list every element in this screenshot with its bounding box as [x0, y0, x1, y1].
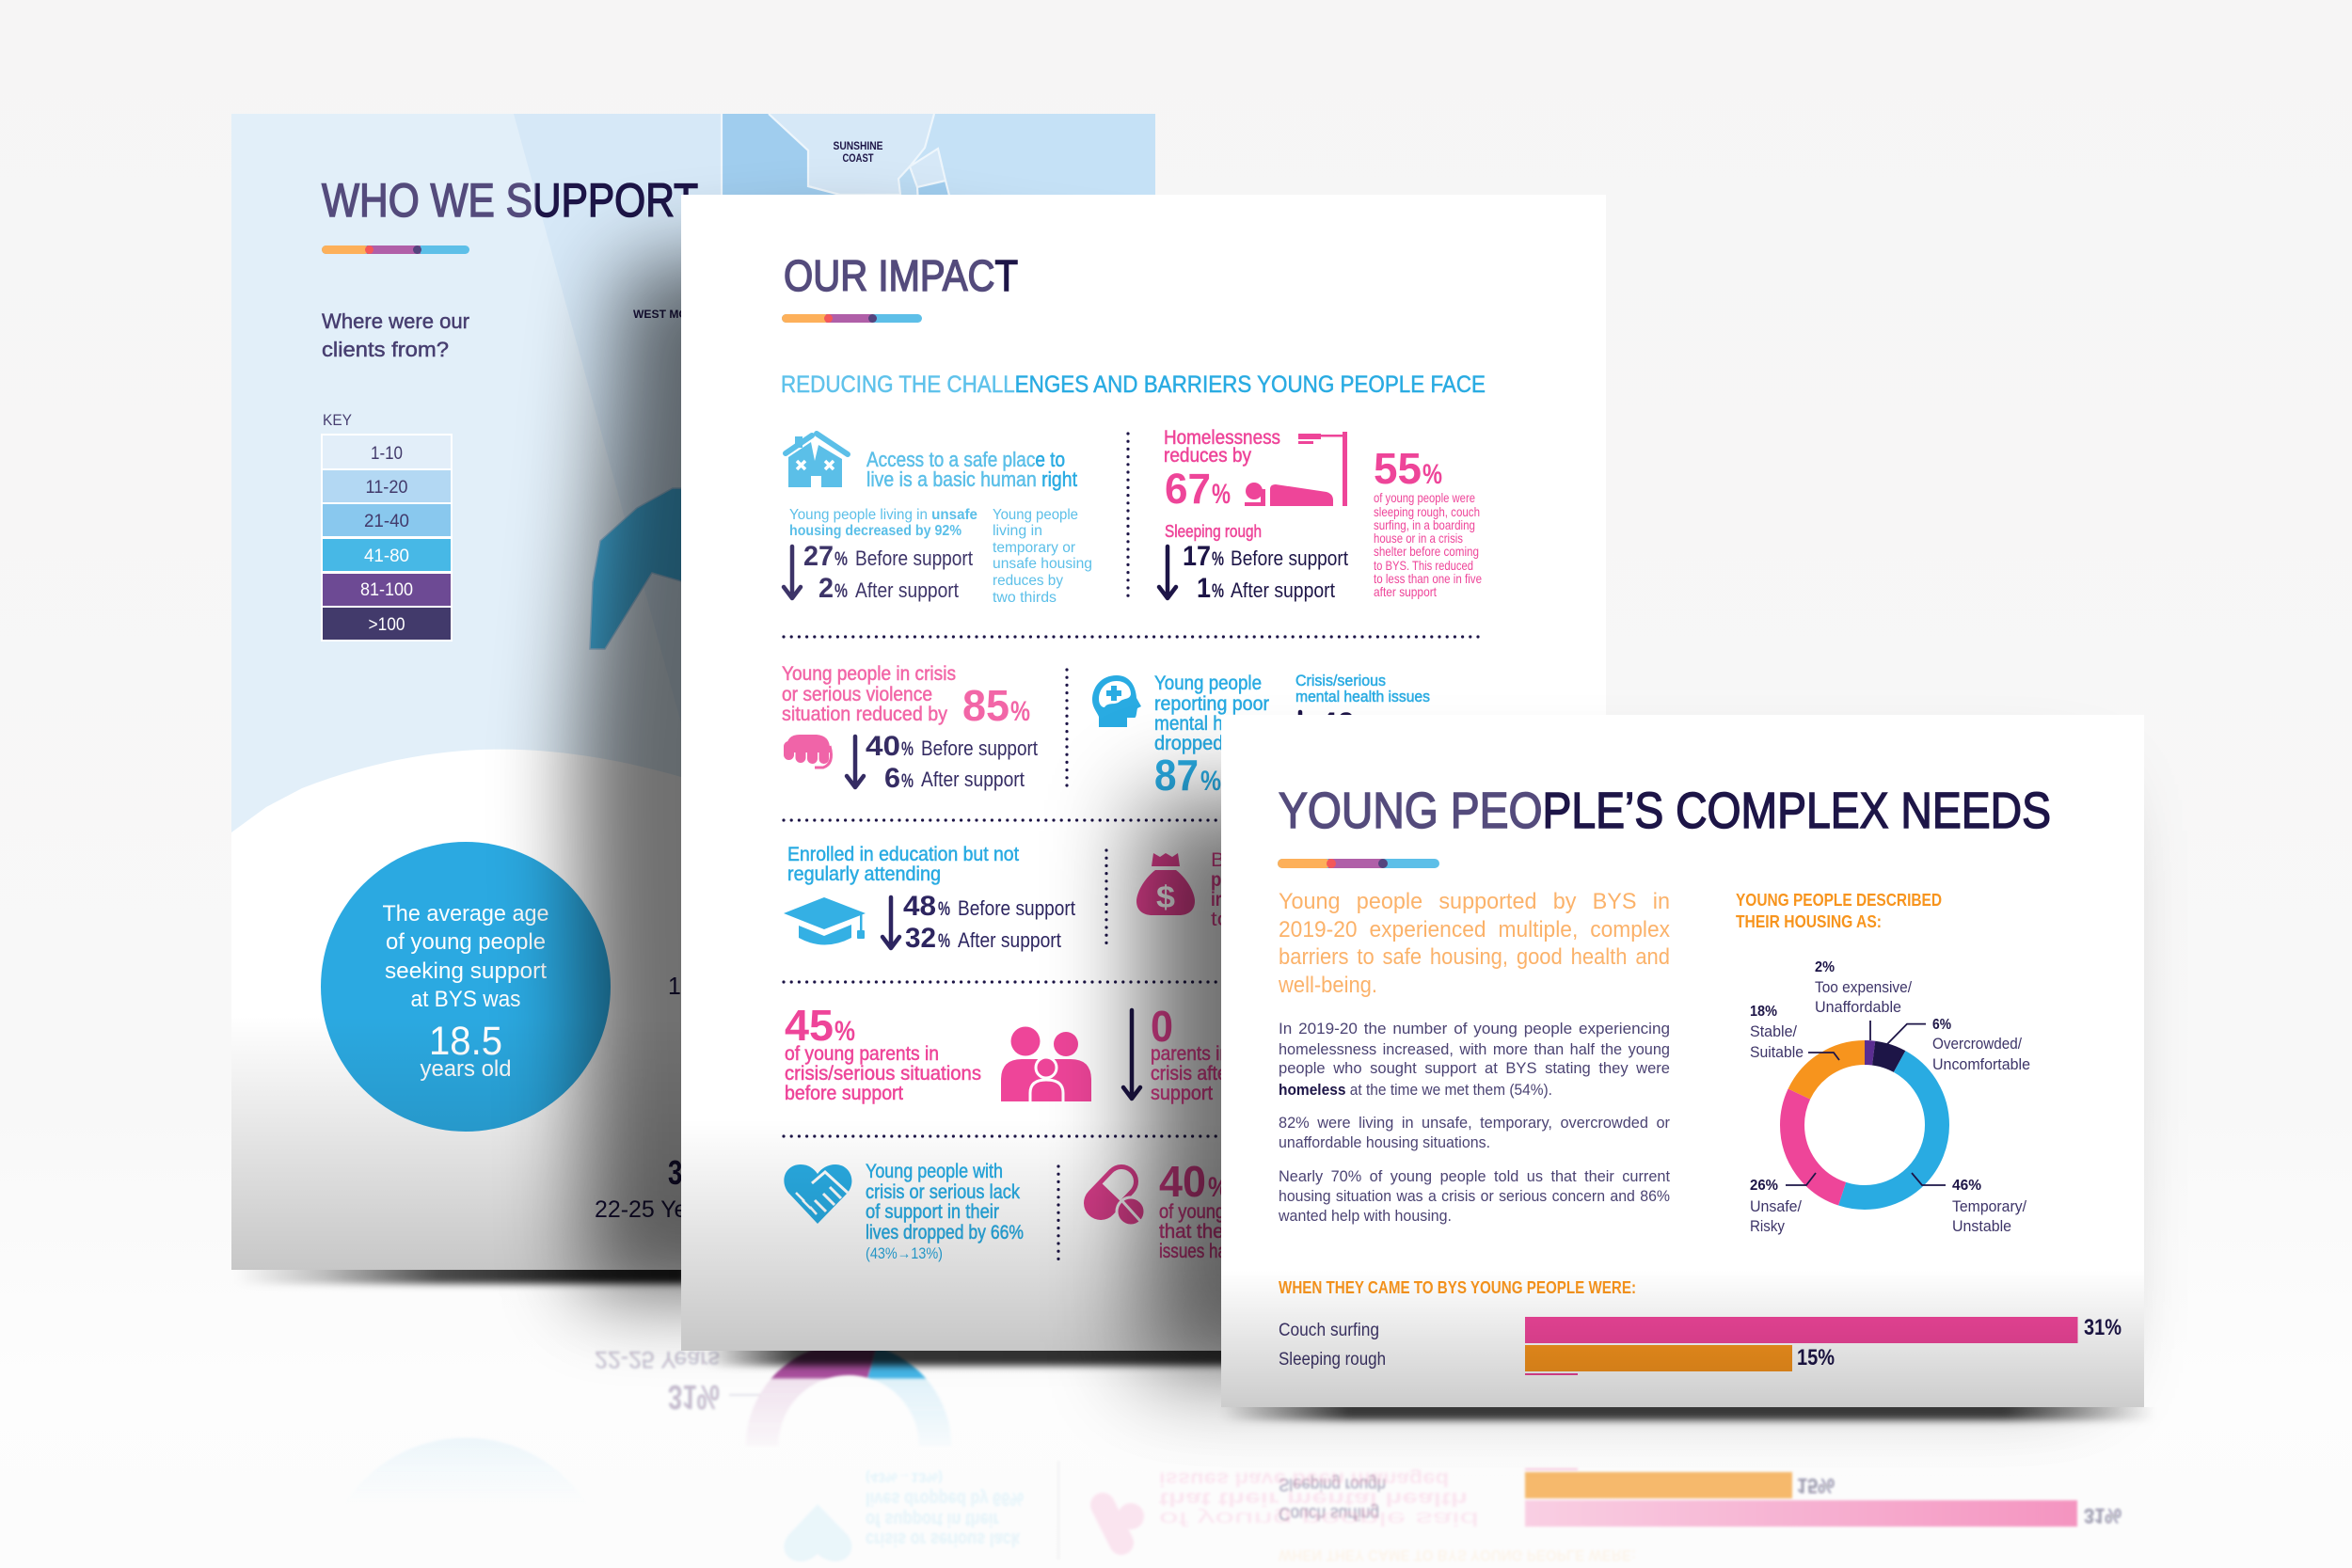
reflection: bar labels: Sleeping rough: [1279, 1474, 1386, 1494]
arrow: [1159, 546, 1176, 598]
reflection: dotted divider: [1057, 1461, 1059, 1560]
block text: [866, 1161, 1024, 1262]
block heading: [787, 844, 1019, 885]
donut label: 6%: 6%: [1932, 1017, 1951, 1033]
body text: people who sought support at BYS stating they were: [1279, 1060, 1670, 1077]
block: safe place: [784, 434, 1092, 606]
before and after stats: %: [1212, 548, 1224, 570]
before and after stats: %: [938, 898, 950, 920]
map: SUNSHINE: [834, 139, 882, 152]
bar chart: Sleeping rough: [1279, 1350, 1386, 1370]
before and after stats: %: [1212, 580, 1224, 602]
donut label: 2%: Unaffordable: [1815, 998, 1901, 1016]
icon: heart handshake: [784, 1164, 851, 1224]
average age circle: The average age: [382, 901, 549, 927]
block heading: [1164, 427, 1280, 467]
icon: graduation cap: [784, 897, 866, 944]
block heading: dropped by: [1154, 733, 1248, 754]
block: crisis or violence: [782, 663, 1038, 794]
icon: money bag: $: [1156, 879, 1175, 914]
stat: 40%: 40: [1159, 1157, 1206, 1206]
before and after stats: %: [834, 548, 848, 570]
block heading: or serious violence: [782, 684, 932, 705]
note: house or in a crisis: [1374, 531, 1463, 546]
stat: 67%: 67: [1165, 465, 1211, 513]
donut label: 46%: Temporary/: [1952, 1197, 2026, 1215]
partly hidden text: [1211, 849, 1295, 930]
map key: 11-20: [365, 478, 408, 498]
bar chart: Couch surfing: [1279, 1321, 1379, 1340]
reflection: pill text: issues have been managed: [1159, 1468, 1449, 1489]
note: [785, 1043, 981, 1104]
before and after stats: %: [834, 580, 848, 602]
map key: [321, 411, 453, 641]
icon: money bag: [1136, 853, 1195, 915]
lead text: [1278, 889, 1670, 998]
colour bar: [1278, 859, 1439, 868]
reflection: pill text: [1159, 1468, 1479, 1528]
stat: 55%: %: [1422, 459, 1442, 490]
reflection: pill text: that their mental health: [1159, 1488, 1468, 1509]
stat: 0 parents: crisis after: [1151, 1063, 1233, 1085]
note: after support: [1374, 584, 1437, 599]
white curve: [231, 749, 681, 1270]
partly hidden text: irregular: [1211, 889, 1277, 911]
icon: pills: [1101, 1169, 1145, 1226]
chart heading: [1736, 891, 1942, 931]
body text: 82% were living in unsafe, temporary, overcrowded or: [1279, 1115, 1670, 1132]
left note: [789, 507, 977, 539]
arrow: [847, 736, 864, 787]
before and after stats: After support: [1231, 578, 1335, 602]
body text: In 2019-20 the number of young people experiencing: [1279, 1021, 1670, 1037]
block heading: [782, 663, 956, 725]
stat: 67%: %: [1212, 479, 1231, 510]
partly hidden text: poverty or: [1211, 869, 1295, 891]
sheen: [231, 114, 610, 832]
right note: Young people: [993, 507, 1078, 523]
title: WHO WE SUPPORT: [322, 174, 698, 227]
before and after stats: 48: [903, 891, 936, 922]
average age circle: [321, 842, 611, 1132]
leader lines: [1786, 1021, 1946, 1185]
lead text: well-being.: [1278, 973, 1377, 998]
lead text: Young people supported by BYS in: [1279, 889, 1670, 914]
average age circle: years old: [420, 1056, 512, 1082]
block heading: live is a basic human right: [866, 467, 1077, 491]
soft shadow of page two: [576, 246, 1599, 1296]
partly hidden text: of young people: [1159, 1201, 1281, 1223]
reflection: handshake text: of support in their: [866, 1509, 999, 1529]
map: [721, 114, 1155, 195]
donut label: 26%: Unsafe/: [1750, 1197, 1802, 1215]
partly hidden text: that their: [1159, 1221, 1234, 1243]
donut label: 6%: [1932, 1017, 2030, 1073]
note: to less than one in five: [1374, 571, 1482, 586]
before and after stats: [803, 541, 973, 604]
shadow under page three: [1227, 1407, 2148, 1426]
arrow: [882, 897, 899, 948]
reflection: bar labels: [1279, 1474, 1386, 1523]
before and after stats: 1: [1197, 573, 1211, 604]
shadow under page one: [247, 1270, 681, 1291]
colour bar: [322, 245, 469, 254]
lead text: 2019-20 experienced multiple, complex: [1279, 917, 1670, 942]
block heading: Young people: [1154, 673, 1262, 694]
section heading: REDUCING THE CHALLENGES AND BARRIERS YOUNG PEOPLE FACE: [781, 372, 1486, 398]
block heading: mental health: [1154, 713, 1262, 735]
map key: 1-10: [371, 444, 403, 464]
partly hidden text: [1159, 1201, 1281, 1262]
note: Crisis/serious: [1295, 672, 1386, 689]
block heading: Enrolled in education but not: [787, 844, 1019, 865]
stat: 0 parents: [1151, 1002, 1233, 1104]
average age circle: at BYS was: [410, 987, 521, 1012]
body text: housing situation was a crisis or serious concern and 86%: [1279, 1188, 1670, 1205]
reflection: heart icon: [784, 1504, 851, 1561]
stat: 0 parents: 0: [1151, 1002, 1173, 1051]
stat: 55%: 55: [1374, 444, 1422, 493]
block: medication: [1101, 1157, 1281, 1262]
donut label: 18%: [1750, 1004, 1804, 1061]
age group labels: 31%: [668, 1153, 720, 1192]
before and after stats: [866, 731, 1038, 794]
question text: Where were our: [322, 309, 469, 333]
donut label: 26%: Risky: [1750, 1217, 1785, 1235]
block heading: Access to a safe place to: [866, 448, 1065, 471]
reflection: pill icon: [1103, 1503, 1144, 1543]
stat: 0 parents: support: [1151, 1083, 1213, 1104]
reflection: blue circle: [343, 1438, 588, 1505]
donut label: 46%: Unstable: [1952, 1217, 2011, 1235]
reflection: bar heading: WHEN THEY CAME TO BYS YOUNG PEOPLE WERE:: [1279, 1546, 1636, 1564]
before and after stats: Before support: [1231, 546, 1348, 570]
before and after stats: After support: [855, 578, 959, 602]
sub heading: Sleeping rough: [1165, 522, 1262, 541]
lead text: barriers to safe housing, good health and: [1279, 944, 1670, 970]
body text: wanted help with housing.: [1278, 1208, 1452, 1225]
before and after stats: 2: [818, 573, 834, 604]
donut label: 26%: [1750, 1178, 1802, 1235]
before and after stats: [903, 891, 1075, 954]
stat: partly hidden: [1300, 707, 1355, 743]
map region: west moreton: [589, 487, 681, 650]
before and after stats: Before support: [958, 896, 1075, 920]
reflection: handshake text: (43%→13%): [866, 1469, 943, 1485]
colour bar: [782, 314, 922, 323]
before and after stats: %: [901, 738, 914, 760]
stat: 0 parents: parents in: [1151, 1043, 1230, 1065]
panel: young people's complex needs: [1221, 715, 2144, 1407]
stat: 85%: 85: [962, 681, 1009, 730]
stat: 45%: 45: [785, 1001, 834, 1050]
note: to BYS. This reduced: [1374, 558, 1473, 573]
block text: (43%→13%): [866, 1244, 943, 1262]
reflection: bar values: 31%: [2084, 1504, 2122, 1528]
map label: WEST MORETON: [633, 309, 727, 321]
bar chart: 31%: [2084, 1315, 2122, 1340]
block: education: [784, 844, 1075, 954]
age group labels: 22-25 Years: [595, 1196, 720, 1223]
partly hidden text: issues have: [1159, 1241, 1244, 1262]
donut label: 18%: Suitable: [1750, 1043, 1804, 1061]
chart heading: YOUNG PEOPLE DESCRIBED: [1736, 891, 1942, 910]
average age circle: seeking support: [385, 958, 547, 984]
reflection: bars: [1525, 1468, 2077, 1527]
reflection: bar values: 15%: [1797, 1474, 1835, 1497]
block heading: [1154, 673, 1269, 754]
page background: [1221, 715, 2144, 1407]
note: before support: [785, 1083, 903, 1104]
block heading: Young people in crisis: [782, 663, 956, 685]
icon: street lamp: [1298, 432, 1347, 506]
note: sleeping rough, couch: [1374, 504, 1480, 519]
right note: [993, 507, 1092, 606]
map: COAST: [843, 151, 874, 165]
donut label: 6%: Uncomfortable: [1932, 1055, 2030, 1073]
stat: 45%: [785, 1001, 855, 1050]
right note: reduces by: [993, 573, 1063, 589]
block text: of support in their: [866, 1201, 999, 1223]
note: crisis/serious situations: [785, 1063, 981, 1085]
block: mental health: [1092, 672, 1430, 800]
before and after stats: %: [901, 770, 914, 792]
block: poverty: [1136, 849, 1295, 930]
reflection: age labels: 22-25 Years: [595, 1346, 720, 1372]
body text: Nearly 70% of young people told us that their current: [1279, 1168, 1670, 1185]
donut label: 2%: [1815, 959, 1912, 1016]
block heading: situation reduced by: [782, 704, 947, 725]
before and after stats: [1183, 541, 1348, 604]
page background: [231, 114, 721, 832]
before and after stats: Before support: [855, 546, 973, 570]
right note: two thirds: [993, 590, 1057, 606]
question text: clients from?: [322, 338, 449, 361]
icon: head with cross: [1092, 675, 1141, 727]
page fade: [231, 1054, 681, 1270]
block heading: regularly attending: [787, 863, 941, 885]
page background: [681, 195, 1606, 1351]
icon: fist: [784, 735, 831, 768]
reflection: bar values: [1797, 1474, 2122, 1528]
note: shelter before coming: [1374, 544, 1479, 559]
icon: family: [1001, 1027, 1091, 1101]
bar chart heading: WHEN THEY CAME TO BYS YOUNG PEOPLE WERE:: [1279, 1278, 1636, 1297]
donut label: 46%: 46%: [1952, 1178, 1981, 1194]
reflection: handshake text: lives dropped by 66%: [866, 1488, 1024, 1509]
stat: 87%: %: [1200, 766, 1221, 797]
average age circle: of young people: [386, 929, 546, 955]
chart heading: THEIR HOUSING AS:: [1736, 912, 1882, 931]
right note: temporary or: [993, 540, 1076, 556]
block heading: Homelessness: [1164, 427, 1280, 449]
note: surfing, in a boarding: [1374, 517, 1475, 532]
donut label: 2%: 2%: [1815, 959, 1835, 975]
stat: 45%: %: [834, 1016, 855, 1047]
block heading: reporting poor: [1154, 693, 1269, 715]
average age circle: 18.5: [429, 1019, 502, 1064]
age group labels: 16%: [668, 972, 715, 1000]
donut chart: [1792, 1053, 1937, 1197]
stat: 40%: %: [1208, 1172, 1229, 1203]
reflection: bar labels: Couch surfing: [1279, 1503, 1379, 1523]
reflection: page one donut: [762, 1359, 935, 1446]
bar chart: 15%: [1797, 1345, 1835, 1370]
page fade: [1221, 1270, 2144, 1407]
question text: [322, 312, 469, 357]
reflection: pill text: of young people said: [1159, 1508, 1479, 1528]
block: homelessness: [1159, 427, 1482, 604]
reflections on the floor: [343, 1346, 2122, 1564]
age group labels: [596, 977, 681, 1217]
map key: 81-100: [360, 580, 413, 600]
before and after stats: Before support: [921, 736, 1038, 760]
partly hidden text: to: [1211, 909, 1230, 930]
arrow: [1123, 1010, 1140, 1099]
title: OUR IMPACT: [784, 251, 1018, 300]
body text: [1278, 1021, 1670, 1225]
before and after stats: After support: [921, 768, 1025, 791]
before and after stats: 32: [905, 923, 936, 954]
icon: person sleeping: [1245, 483, 1333, 506]
panel: who we support: [231, 114, 1155, 1270]
partly hidden text: Being in: [1211, 849, 1286, 871]
map key: 21-40: [364, 512, 409, 531]
block: support in their lives: [784, 1161, 1024, 1262]
shadow under page two: [709, 1351, 1221, 1371]
donut label: 2%: Too expensive/: [1815, 978, 1912, 996]
icon: cracked house: [786, 434, 848, 487]
note: mental health issues: [1295, 688, 1430, 705]
stat: 85%: %: [1010, 696, 1030, 727]
reflection: age labels: [595, 1346, 760, 1417]
reflection: handshake text: [866, 1469, 1024, 1549]
before and after stats: After support: [958, 928, 1061, 952]
before and after stats: %: [938, 930, 950, 952]
before and after stats: 6: [884, 763, 900, 794]
body text: homeless at the time we met them (54%).: [1279, 1082, 1552, 1099]
body text: unaffordable housing situations.: [1279, 1134, 1490, 1151]
map key: 41-80: [364, 546, 409, 566]
page fade: [681, 1119, 1606, 1351]
before and after stats: 17: [1183, 541, 1211, 572]
left note: Young people living in unsafe: [789, 507, 977, 523]
block text: crisis or serious lack: [866, 1181, 1020, 1203]
left note: housing decreased by 92%: [789, 523, 961, 539]
right note: living in: [993, 523, 1042, 539]
block heading: reduces by: [1164, 445, 1251, 467]
donut label: 18%: 18%: [1750, 1004, 1777, 1020]
stat: 40%: [1159, 1157, 1229, 1206]
panel: our impact: [681, 195, 1606, 1351]
note: of young people were: [1374, 490, 1475, 505]
block text: lives dropped by 66%: [866, 1222, 1024, 1243]
body text: homelessness increased, with more than half the young: [1279, 1041, 1670, 1058]
title: YOUNG PEOPLE’S COMPLEX NEEDS: [1279, 783, 2051, 839]
right note: unsafe housing: [993, 556, 1092, 572]
note: of young parents in: [785, 1043, 939, 1065]
soft shadow of page three: [1143, 800, 2084, 1373]
before and after stats: 27: [803, 541, 834, 572]
donut label: 6%: Overcrowded/: [1932, 1035, 2022, 1053]
block heading: [866, 448, 1077, 491]
map key: KEY: [323, 411, 352, 429]
map key: >100: [369, 615, 405, 635]
block: young parents: [785, 1001, 1233, 1104]
donut label: 26%: 26%: [1750, 1178, 1778, 1194]
note: [1374, 490, 1482, 599]
donut label: 18%: Stable/: [1750, 1022, 1797, 1040]
donut label: 46%: [1952, 1178, 2026, 1235]
before and after stats: 40: [866, 731, 900, 762]
reflection: age labels: 31%: [668, 1378, 720, 1417]
note: [1295, 672, 1430, 705]
block text: Young people with: [866, 1161, 1003, 1182]
stat: 87%: 87: [1154, 751, 1199, 800]
bar chart: [1279, 1315, 2122, 1375]
reflection: handshake text: crisis or serious lack: [866, 1528, 1021, 1549]
arrow: [784, 546, 801, 598]
stat: partly hidden: 40: [1320, 707, 1355, 738]
